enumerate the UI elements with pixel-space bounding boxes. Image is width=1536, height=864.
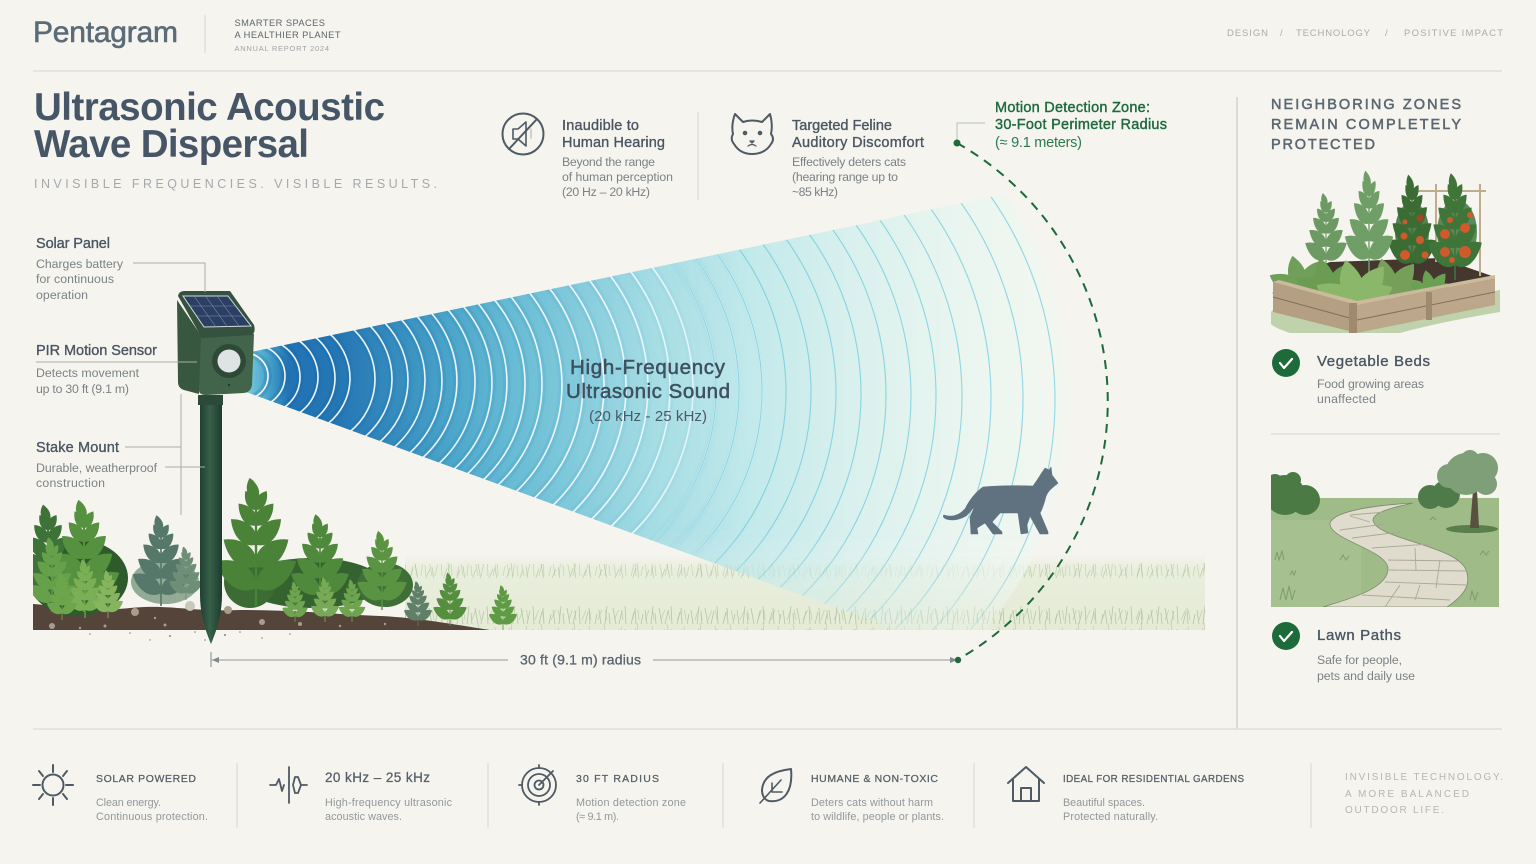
footer closing statement: INVISIBLE TECHNOLOGY.	[1345, 772, 1503, 783]
footer: frequency: acoustic waves.	[325, 811, 402, 823]
illustration: lawn path	[1265, 450, 1499, 607]
right panel heading: NEIGHBORING ZONES	[1271, 97, 1461, 113]
header navigation: /	[1385, 28, 1388, 39]
header brand block: Pentagram	[33, 16, 178, 49]
callout: inaudible to human hearing: of human perception	[562, 170, 673, 184]
leafy greens	[1267, 171, 1451, 319]
footer: residential gardens: IDEAL FOR RESIDENTIAL GARDENS	[1063, 774, 1244, 785]
label: PIR motion sensor: Detects movement	[36, 366, 140, 380]
wave label: (20 kHz - 25 kHz)	[589, 408, 707, 425]
sand specks	[89, 631, 291, 641]
label: PIR motion sensor: PIR Motion Sensor	[36, 343, 157, 359]
stone path	[1323, 503, 1468, 607]
wave label: High-Frequency	[570, 356, 726, 379]
callout: targeted feline discomfort: Targeted Feline	[792, 118, 892, 134]
footer: residential gardens: Protected naturally.	[1063, 811, 1158, 823]
footer: radius: Motion detection zone	[576, 797, 686, 809]
benefit: vegetable beds: Food growing areas	[1317, 377, 1424, 391]
callout: motion detection zone: 30-Foot Perimeter Radius	[995, 117, 1167, 133]
callout: inaudible to human hearing: Beyond the range	[562, 155, 655, 169]
tree	[1418, 450, 1498, 533]
radius dimension line	[211, 652, 961, 668]
stake	[200, 404, 222, 644]
callout: motion detection zone	[957, 100, 1167, 151]
footer: humane: HUMANE & NON-TOXIC	[811, 773, 938, 785]
title: Wave Dispersal	[34, 123, 309, 166]
title: Ultrasonic Acoustic	[34, 86, 385, 129]
footer: humane: Deters cats without harm	[811, 797, 933, 809]
right panel heading: REMAIN COMPLETELY	[1271, 117, 1461, 133]
benefit: lawn paths: pets and daily use	[1317, 669, 1415, 683]
callout: motion detection zone: (≈ 9.1 meters)	[995, 135, 1082, 151]
label: stake mount	[36, 394, 205, 515]
tomato plants	[1384, 173, 1486, 280]
footer: frequency: 20 kHz – 25 kHz	[325, 770, 430, 785]
icon: house	[1008, 767, 1044, 801]
right panel heading: PROTECTED	[1271, 137, 1375, 153]
top cap	[178, 291, 255, 338]
labels: device parts	[36, 236, 205, 515]
label: solar panel: Charges battery	[36, 257, 124, 271]
icon: waveform	[270, 767, 307, 803]
PIR sensor	[212, 344, 246, 378]
footer: radius: (≈ 9.1 m).	[576, 811, 619, 823]
header brand block: ANNUAL REPORT 2024	[234, 44, 329, 53]
title	[34, 86, 385, 166]
benefit: vegetable beds: unaffected	[1317, 392, 1376, 406]
benefit: lawn paths	[1272, 622, 1415, 683]
wave label: Ultrasonic Sound	[566, 380, 730, 403]
icon: check	[1272, 349, 1300, 377]
header navigation: TECHNOLOGY	[1296, 28, 1371, 39]
wave label	[566, 356, 730, 425]
label: solar panel: operation	[36, 288, 88, 302]
bush	[1271, 472, 1320, 515]
callout: targeted feline discomfort: ~85 kHz)	[792, 185, 838, 199]
footer closing statement: OUTDOOR LIFE.	[1345, 805, 1444, 816]
label: PIR motion sensor	[36, 343, 197, 396]
callout: inaudible to human hearing: Inaudible to	[562, 118, 639, 134]
wood frame	[1273, 275, 1495, 333]
icon: muted speaker	[502, 114, 544, 154]
footer: humane	[760, 769, 944, 823]
callout: motion detection zone: Motion Detection Zone:	[995, 100, 1150, 116]
icon: cat face	[732, 114, 773, 154]
header brand block	[33, 15, 341, 53]
footer: solar powered: Continuous protection.	[96, 811, 208, 823]
icon: check	[1272, 622, 1300, 650]
label: PIR motion sensor: up to 30 ft (9.1 m)	[36, 382, 129, 396]
footer: residential gardens	[1008, 767, 1244, 823]
footer: radius	[519, 765, 686, 823]
label: stake mount: Durable, weatherproof	[36, 461, 158, 475]
benefit: lawn paths: Lawn Paths	[1317, 627, 1401, 644]
icon: leaf	[760, 769, 791, 803]
header brand block: A HEALTHIER PLANET	[234, 30, 341, 40]
header navigation: DESIGN	[1227, 28, 1268, 39]
header navigation: POSITIVE IMPACT	[1404, 28, 1503, 39]
footer: solar powered	[33, 765, 208, 823]
cat silhouette	[943, 467, 1058, 534]
header navigation	[1227, 28, 1503, 39]
label: stake mount: construction	[36, 476, 105, 490]
right panel heading	[1271, 97, 1461, 153]
device: solar stake repeller	[177, 291, 255, 644]
callout: targeted feline discomfort: (hearing range up to	[792, 170, 898, 184]
footer: frequency	[270, 767, 453, 823]
callout: targeted feline discomfort: Auditory Discomfort	[792, 135, 924, 151]
illustration: raised vegetable bed	[1267, 171, 1500, 333]
footer: frequency: High-frequency ultrasonic	[325, 797, 453, 809]
callout: inaudible to human hearing: Human Hearing	[562, 135, 665, 151]
footer: radius: 30 FT RADIUS	[576, 773, 659, 785]
footer closing statement	[1345, 772, 1503, 816]
footer: residential gardens: Beautiful spaces.	[1063, 797, 1145, 809]
icon: sun	[33, 765, 73, 805]
benefit: lawn paths: Safe for people,	[1317, 653, 1402, 667]
benefit: vegetable beds: Vegetable Beds	[1317, 353, 1430, 370]
radius dimension line: 30 ft (9.1 m) radius	[520, 652, 641, 668]
footer: humane: to wildlife, people or plants.	[811, 811, 944, 823]
tagline: INVISIBLE FREQUENCIES. VISIBLE RESULTS.	[34, 177, 437, 191]
body front	[199, 334, 254, 395]
footer: solar powered: Clean energy.	[96, 797, 161, 809]
detection radius dashed arc	[954, 140, 1108, 660]
header brand block: SMARTER SPACES	[234, 18, 325, 28]
callout: targeted feline discomfort	[732, 114, 924, 199]
body left side	[177, 300, 202, 394]
icon: target radar	[519, 765, 556, 805]
trellis	[1413, 184, 1486, 276]
garden plants and soil	[11, 478, 519, 630]
benefit: vegetable beds	[1272, 349, 1430, 406]
callout: inaudible to human hearing: (20 Hz – 20 kHz)	[562, 185, 650, 199]
callout: inaudible to human hearing	[502, 114, 673, 199]
label: solar panel: Solar Panel	[36, 236, 110, 252]
label: stake mount: Stake Mount	[36, 440, 119, 456]
header navigation: /	[1280, 28, 1283, 39]
callout: targeted feline discomfort: Effectively deters cats	[792, 155, 906, 169]
footer closing statement: A MORE BALANCED	[1345, 789, 1469, 800]
ground grass strip	[405, 553, 1205, 630]
ultrasonic wave cone	[246, 195, 1056, 630]
solar panel	[183, 296, 251, 327]
label: solar panel: for continuous	[36, 272, 114, 286]
footer: solar powered: SOLAR POWERED	[96, 773, 196, 785]
label: solar panel	[36, 236, 205, 302]
